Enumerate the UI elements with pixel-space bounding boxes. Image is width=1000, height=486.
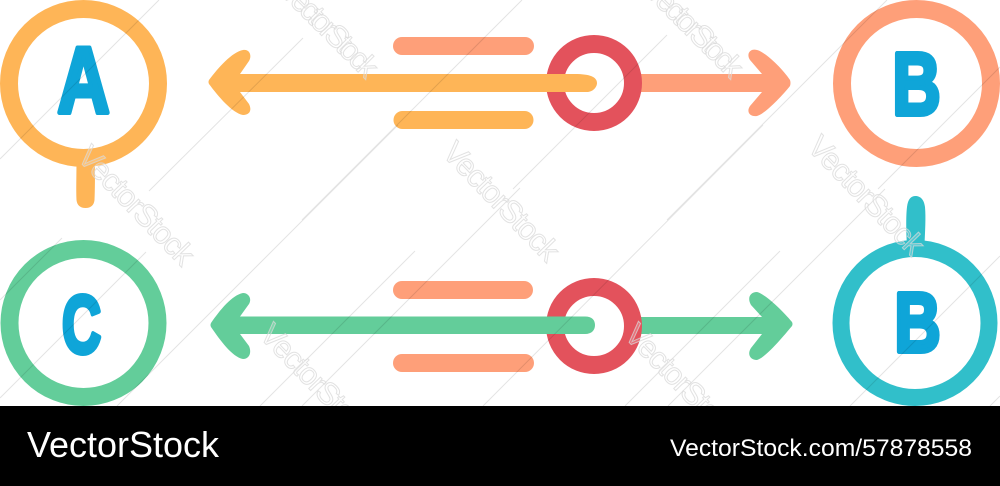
footer image url text: VectorStock.com/57878558 bbox=[670, 435, 972, 462]
icon: teal ring bbox=[841, 248, 989, 398]
letter B: B bbox=[892, 35, 941, 134]
arrow: green left arrow bbox=[210, 293, 595, 359]
footer brand text: VectorStock bbox=[27, 424, 220, 465]
footer band bbox=[0, 406, 1000, 486]
watermark overlay: VectorStock bbox=[436, 135, 567, 269]
icon: salmon ring bbox=[842, 9, 991, 158]
bar: orange bbox=[394, 111, 534, 129]
panel: bottom-right circle B with stem bbox=[841, 196, 989, 398]
letter B: B bbox=[894, 275, 941, 370]
watermark overlay: VectorStock bbox=[801, 129, 932, 263]
panel: top connector bbox=[208, 37, 790, 129]
bar: salmon bbox=[393, 37, 534, 55]
watermark overlay: VectorStock bbox=[71, 139, 202, 273]
stem above circle B bbox=[906, 196, 925, 245]
bar: salmon bbox=[393, 281, 533, 299]
watermark overlay: VectorStock bbox=[253, 317, 384, 451]
bar: salmon bbox=[393, 354, 534, 372]
arrow: orange left arrow bbox=[208, 50, 597, 115]
watermark overlay: VectorStock bbox=[618, 317, 749, 451]
panel: bottom connector bbox=[210, 281, 792, 372]
icon: orange ring bbox=[9, 9, 158, 158]
panel: top-right circle B bbox=[842, 9, 991, 158]
letter C: C bbox=[62, 278, 101, 370]
stem below circle A bbox=[76, 160, 95, 208]
panel: top-left circle A with stem bbox=[9, 9, 158, 208]
letter A: A bbox=[57, 27, 110, 133]
arrow: salmon right arrow bbox=[630, 50, 790, 116]
panel: bottom-left circle C bbox=[10, 249, 158, 397]
icon: red ring bbox=[555, 44, 633, 122]
arrow: green right arrow bbox=[630, 292, 792, 360]
icon: red ring bbox=[555, 287, 633, 365]
icon: green ring bbox=[10, 249, 158, 397]
